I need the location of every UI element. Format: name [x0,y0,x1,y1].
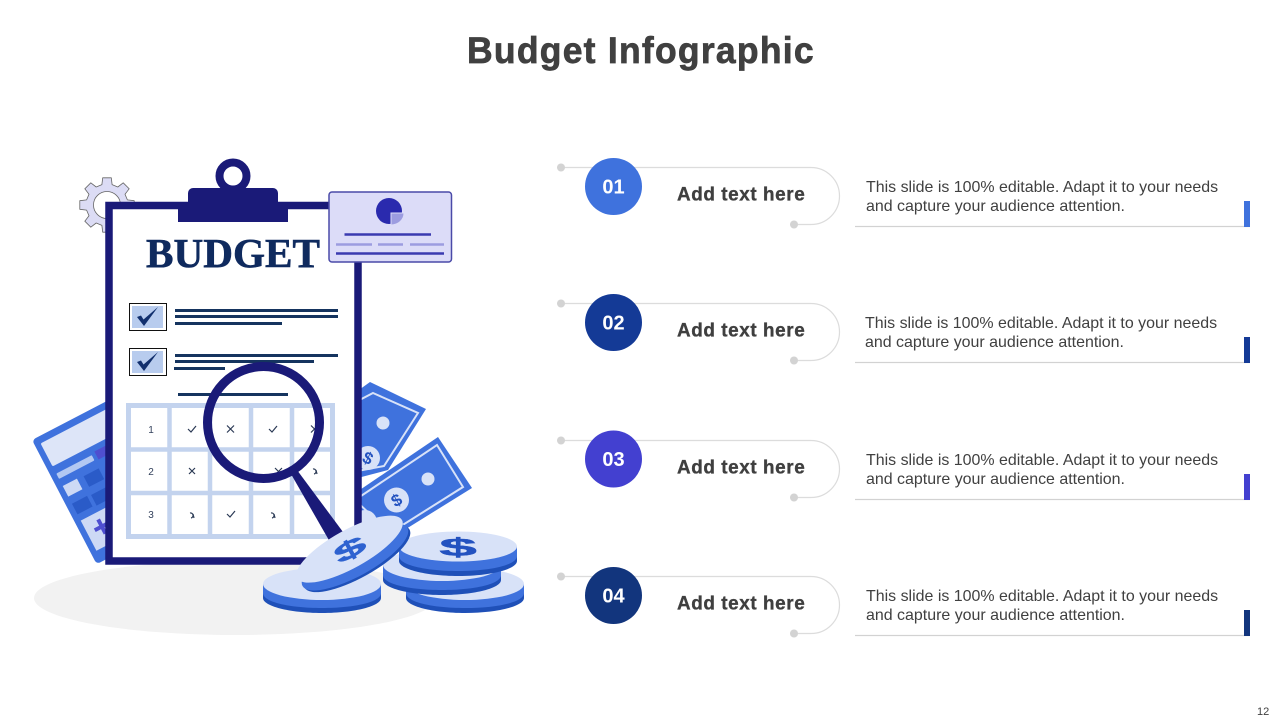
icon: magnifying glass [208,366,343,542]
description 03: This slide is 100% editable. Adapt it to your needs [866,452,1218,469]
coin tilted: $ [329,530,371,570]
item heading 01: Add text here [677,184,805,206]
coin stack [263,502,524,613]
connector 01 [557,164,840,228]
coin top: $ [439,533,477,561]
coin bottom left [263,568,381,613]
table grid: 2 [148,467,154,478]
number badge 04 [585,567,642,624]
underline and accent bar 02 [855,337,1250,363]
item 03 [557,430,1250,502]
divider line [178,393,288,396]
connector 04 [557,572,840,638]
table grid: 3 [148,510,154,521]
item 04 [557,567,1250,638]
number badge 02: 02 [602,312,625,334]
underline and accent bar 04 [855,610,1250,636]
number badge 03 [585,430,642,488]
ground shadow [34,561,436,635]
coin tilted [288,502,419,605]
budget illustration [32,162,524,635]
icon: chart card [329,192,452,262]
icon: banknote front [345,437,472,542]
coin top [399,532,517,576]
item heading 02: Add text here [677,320,805,342]
number badge 02 [585,294,642,351]
item 01 [557,158,1250,228]
page number: 12 [1257,706,1269,718]
underline and accent bar 03 [855,474,1250,500]
table grid [128,405,332,536]
clipboard clip [178,162,288,222]
title: Budget Infographic [467,29,815,71]
item heading 04: Add text here [677,593,805,615]
icon: calculator [32,371,230,564]
item heading 03: Add text here [677,457,805,479]
icon: banknote back: $ [359,448,377,469]
checklist item 2 [130,348,338,376]
icon: banknote back [345,382,426,480]
description 04: This slide is 100% editable. Adapt it to your needs [866,588,1218,605]
clipboard [109,162,358,561]
icon: banknote front: $ [388,490,406,511]
number badge 01: 01 [602,176,625,198]
description 02: and capture your audience attention. [865,334,1124,351]
checklist item 1 [130,304,338,330]
description 04: and capture your audience attention. [866,607,1125,624]
coin bottom right [406,568,524,613]
item 02 [557,294,1250,364]
description 01: and capture your audience attention. [866,198,1125,215]
description 03: and capture your audience attention. [866,471,1125,488]
underline and accent bar 01 [855,201,1250,227]
number badge 01 [585,158,642,215]
connector 03 [557,436,840,502]
clipboard heading: BUDGET [146,230,320,276]
number badge 03: 03 [602,449,625,471]
icon: gear [80,178,134,232]
table grid: 1 [148,425,154,436]
description 01: This slide is 100% editable. Adapt it to your needs [866,179,1218,196]
coin middle [383,549,501,595]
number badge 04: 04 [602,586,625,608]
connector 02 [557,300,840,364]
description 02: This slide is 100% editable. Adapt it to your needs [865,315,1217,332]
